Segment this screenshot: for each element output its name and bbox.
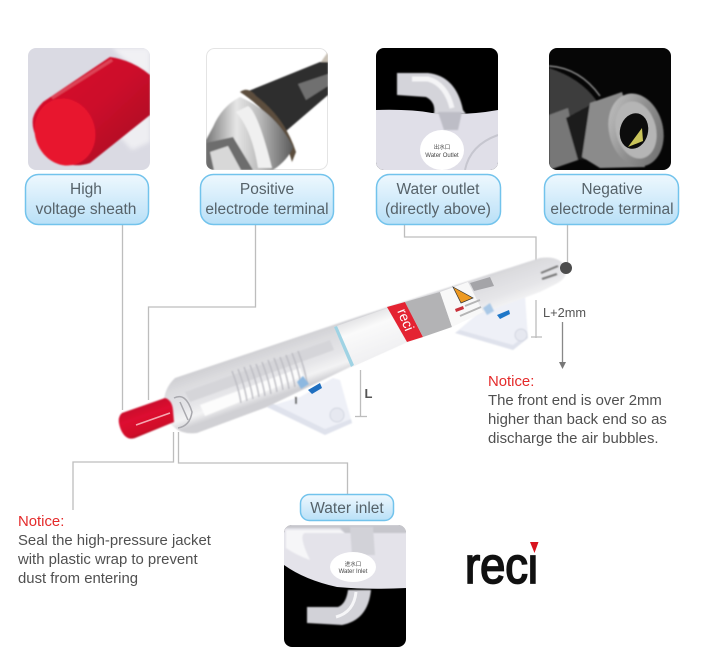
label: negative electrode terminal: electrode terminal — [550, 201, 674, 218]
label: negative electrode terminal: Negative — [581, 181, 643, 198]
blue clip rear light — [297, 376, 309, 389]
notice: front end — [488, 374, 667, 447]
notice: plastic wrap: with plastic wrap to prevent — [17, 552, 198, 568]
label: water outlet: (directly above) — [385, 201, 491, 218]
notice: plastic wrap — [17, 514, 212, 587]
notice: plastic wrap: Seal the high-pressure jacket — [18, 533, 212, 549]
notice: plastic wrap: Notice: — [18, 514, 64, 530]
white label — [334, 308, 407, 367]
label: high voltage sheath: High — [70, 181, 102, 198]
stand: rear mount — [267, 378, 352, 435]
blue stripe — [334, 326, 354, 367]
rear electrode detail — [174, 397, 192, 428]
photo: water inlet: 进水口 — [345, 560, 361, 568]
blue clip rear dark — [308, 383, 322, 394]
stand: front mount — [455, 296, 528, 350]
photo: positive electrode terminal — [206, 48, 328, 170]
laser tube — [119, 257, 572, 439]
label: negative electrode terminal — [544, 174, 678, 224]
tube body — [164, 257, 566, 433]
notice: front end: higher than back end so as — [488, 412, 667, 428]
sheath highlight — [136, 413, 170, 425]
label: positive electrode terminal — [200, 174, 334, 224]
notice: front end: discharge the air bubbles. — [488, 431, 659, 447]
logo: reci: reci — [465, 537, 538, 594]
dimension L+2mm: L+2mm — [543, 305, 586, 320]
photo: water inlet: Water Inlet — [339, 569, 368, 575]
glass coil — [232, 351, 307, 403]
label: water inlet — [300, 494, 394, 520]
front electrode detail — [541, 266, 558, 279]
photo: high voltage sheath — [25, 48, 150, 174]
grey band — [405, 292, 452, 337]
dimension L: L — [364, 386, 372, 401]
inner highlight — [200, 368, 303, 416]
photo: water outlet — [376, 48, 498, 170]
photo: water inlet — [284, 525, 406, 647]
label: water outlet — [376, 174, 500, 224]
arrow down — [559, 322, 566, 369]
photo: water outlet: 出水口 — [434, 143, 450, 151]
small red tag — [455, 306, 464, 312]
label: high voltage sheath — [26, 174, 148, 224]
blue clip front dark — [497, 310, 510, 319]
white hazard section — [440, 282, 483, 327]
connector lines — [73, 225, 568, 510]
hazard section text strips — [460, 300, 481, 316]
label: water outlet: Water outlet — [396, 181, 480, 198]
negative terminal — [560, 262, 572, 274]
photo: water outlet: Water Outlet — [425, 153, 459, 159]
small grey tag — [470, 277, 494, 291]
notice: front end: Notice: — [488, 374, 534, 390]
photo: negative electrode terminal — [549, 48, 671, 172]
red band — [387, 302, 423, 342]
notice: front end: The front end is over 2mm — [488, 393, 662, 409]
notice: plastic wrap: dust from entering — [18, 571, 138, 587]
blue clip front light — [483, 303, 494, 315]
label: high voltage sheath: voltage sheath — [36, 201, 136, 218]
red sheath — [119, 398, 174, 439]
label: positive electrode terminal: electrode terminal — [205, 201, 329, 218]
inner tube — [185, 340, 334, 402]
hazard sign — [453, 287, 473, 303]
reci band text: reci — [394, 306, 418, 333]
label: water inlet: Water inlet — [310, 500, 384, 517]
label: positive electrode terminal: Positive — [240, 181, 294, 198]
